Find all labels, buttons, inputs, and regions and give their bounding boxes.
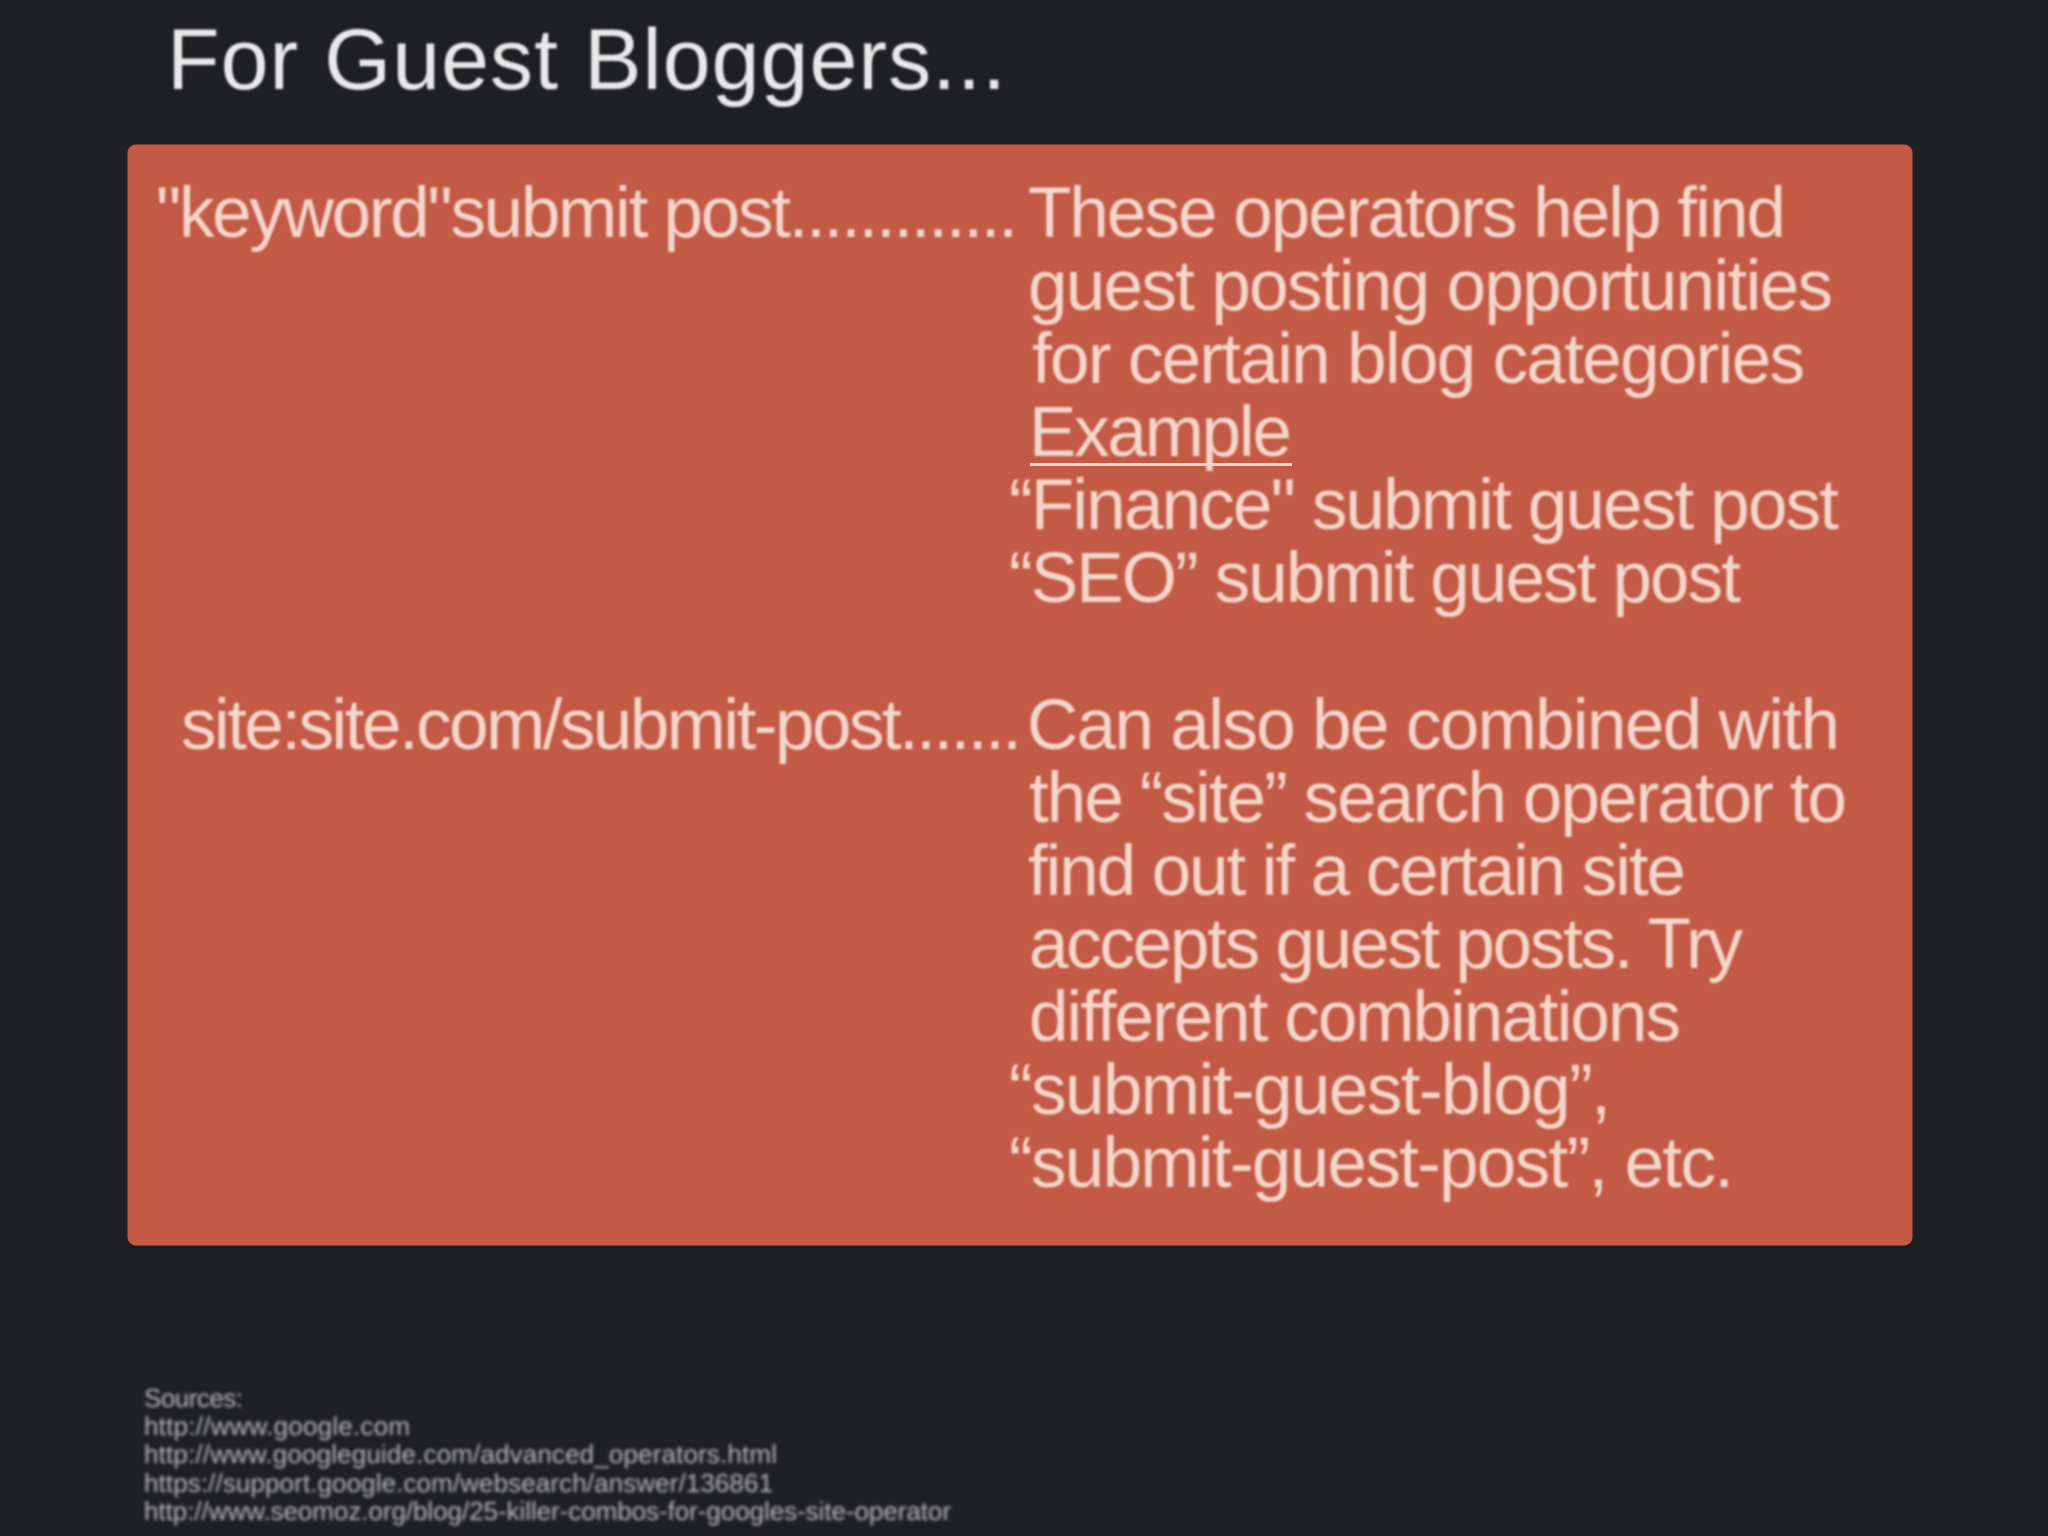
description: guest posting operators: These operators help find (1028, 174, 1786, 253)
sources (144, 1383, 951, 1526)
sources: http://www.google.com (144, 1411, 410, 1441)
description: site operator combinations: “submit-guest-blog”, (1009, 1051, 1611, 1130)
sources: http://www.seomoz.org/blog/25-killer-combos-for-googles-site-operator (144, 1496, 951, 1526)
description: site operator combinations: find out if a certain site (1028, 832, 1686, 911)
sources: https://support.google.com/websearch/answer/136861 (144, 1468, 773, 1498)
description: site operator combinations: Can also be combined with (1027, 686, 1840, 765)
description: site operator combinations (1009, 686, 1847, 1203)
operator: site submit post: site:site.com/submit-post....... (181, 686, 1022, 765)
description: site operator combinations: accepts guest posts. Try (1029, 905, 1744, 984)
title: For Guest Bloggers... (167, 12, 1006, 108)
sources: http://www.googleguide.com/advanced_operators.html (144, 1439, 777, 1469)
description: guest posting operators: Example (1029, 393, 1292, 472)
description: site operator combinations: different combinations (1029, 978, 1681, 1057)
panel: operators (127, 144, 1913, 1246)
description: site operator combinations: the “site” search operator to (1029, 759, 1847, 838)
panel background (127, 144, 1913, 1246)
description: guest posting operators: “SEO” submit guest post (1009, 539, 1741, 618)
sources: Sources: (144, 1383, 243, 1413)
description: site operator combinations: “submit-guest-post”, etc. (1009, 1124, 1734, 1203)
operator: keyword submit post: "keyword"submit post............. (156, 174, 1018, 253)
description: guest posting operators: guest posting opportunities (1028, 247, 1833, 326)
description: guest posting operators (1009, 174, 1839, 618)
description: guest posting operators: for certain blog categories (1032, 320, 1805, 399)
description: guest posting operators: “Finance" submit guest post (1009, 466, 1839, 545)
